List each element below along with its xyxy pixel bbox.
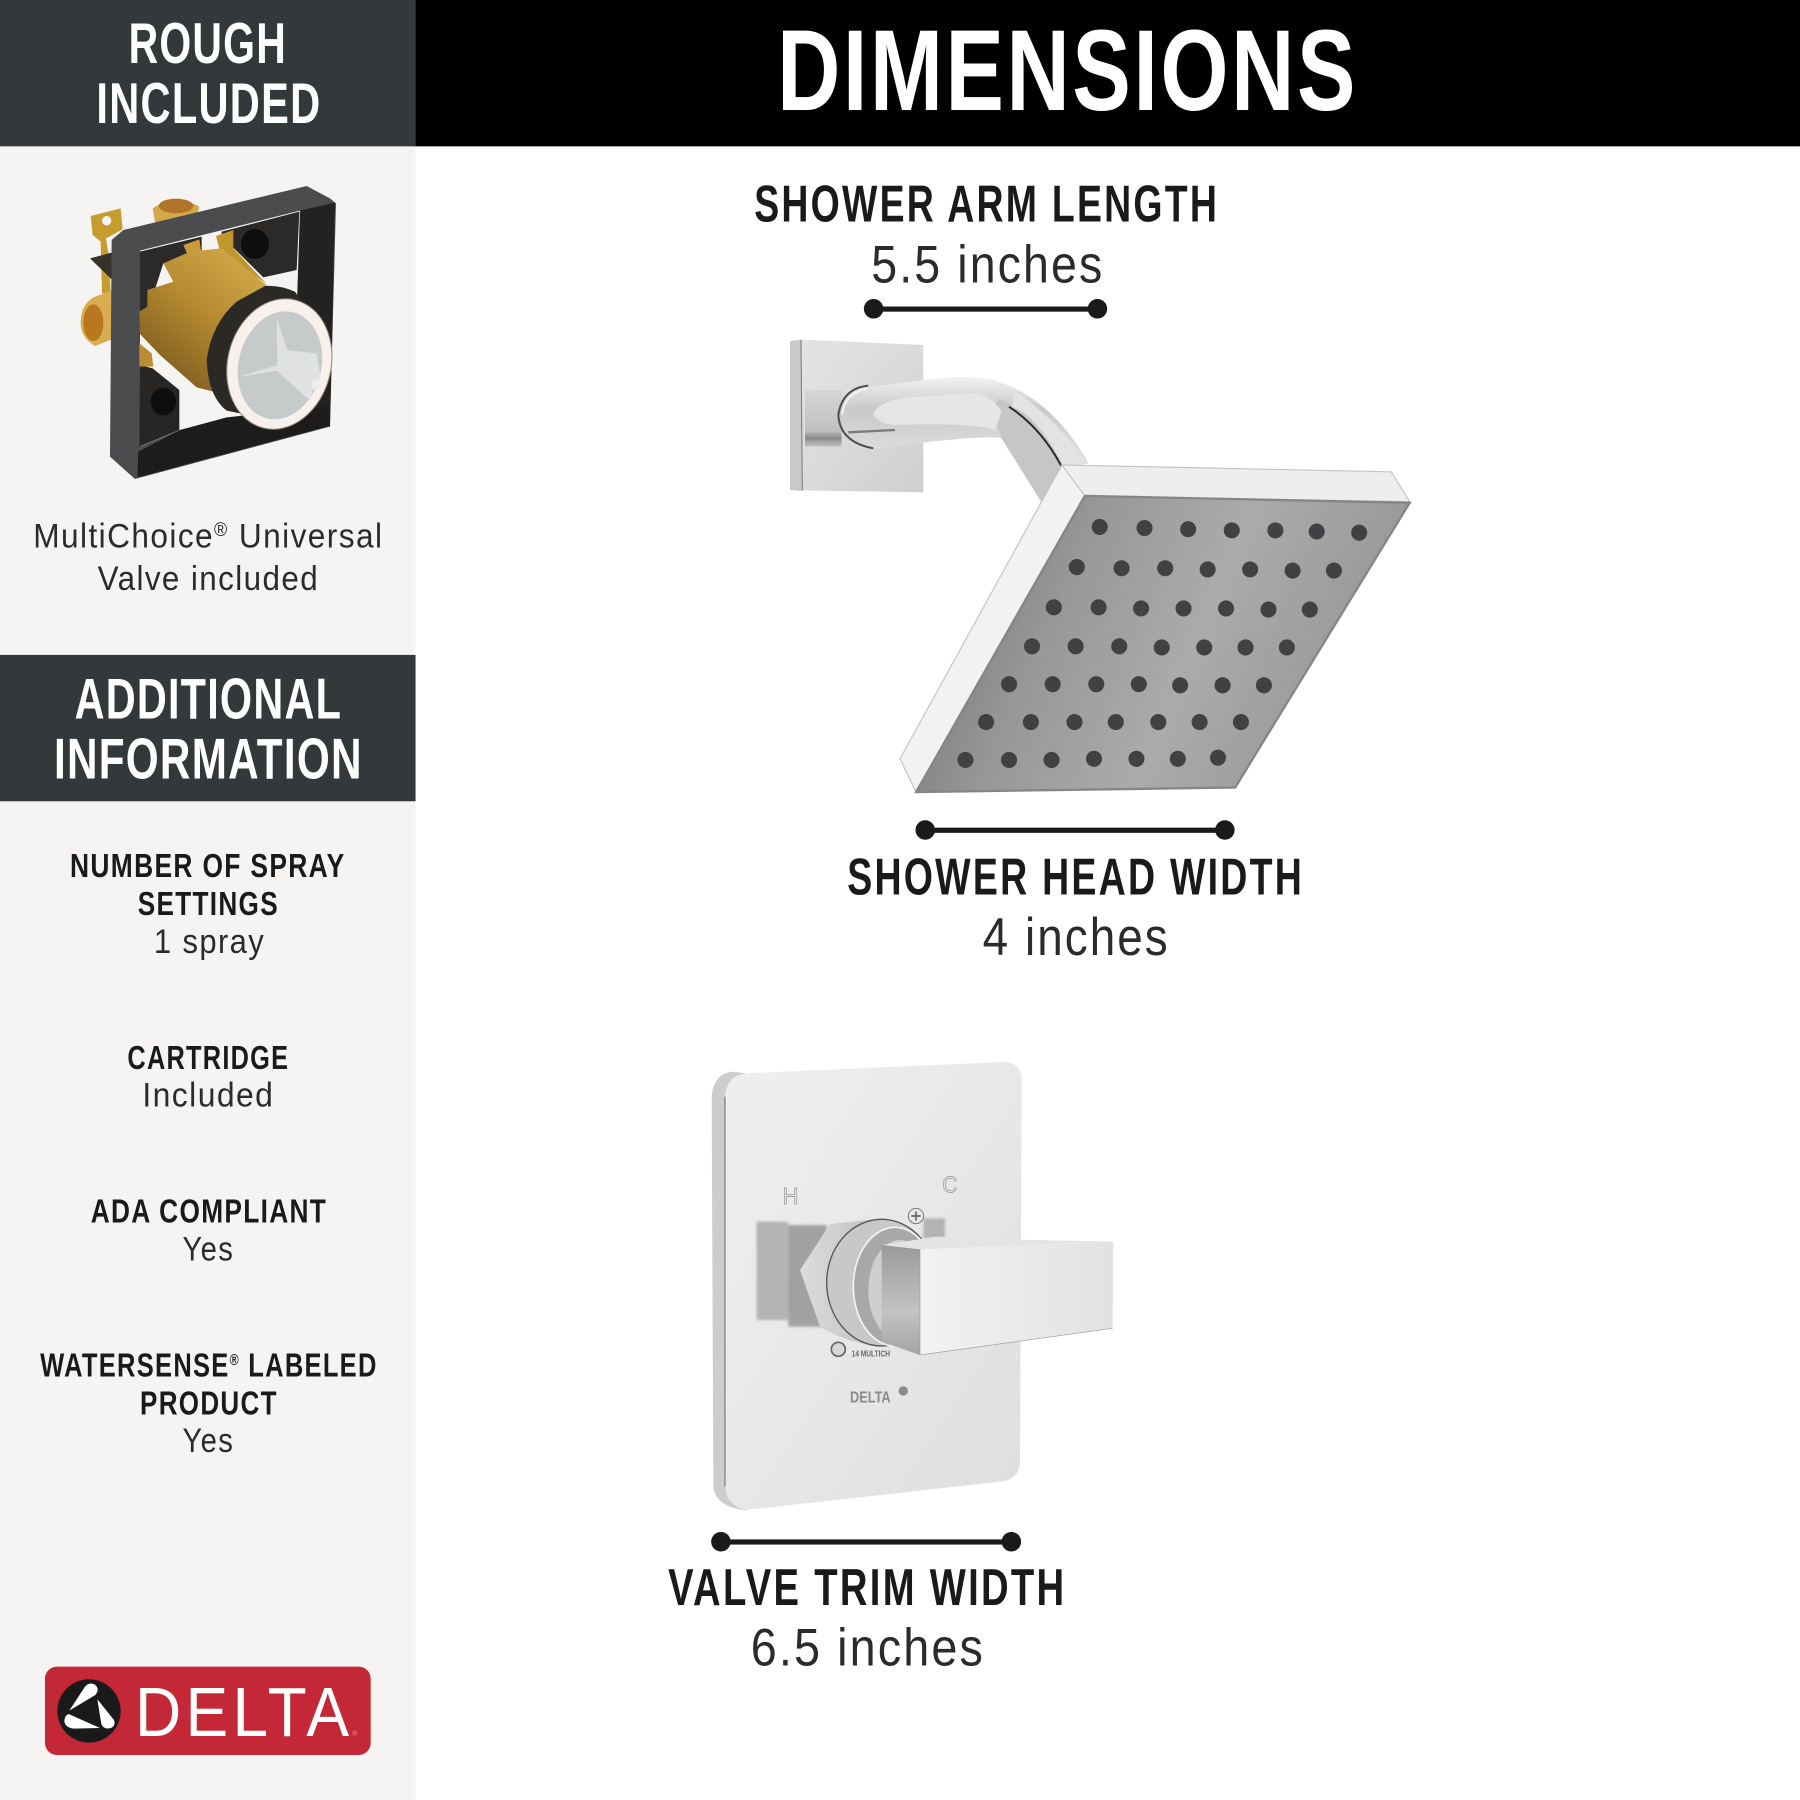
label: valve trim width: VALVE TRIM WIDTH [668,1558,1066,1616]
left pipe [81,291,112,346]
header: rough included: INCLUDED [96,72,321,136]
trim plate: C [942,1172,958,1198]
info: cartridge: Included [142,1077,274,1115]
frame [110,186,336,479]
label: valve trim width [668,1558,1066,1678]
info: spray settings: 1 spray [154,923,265,961]
info: ADA compliant: ADA COMPLIANT [91,1194,327,1231]
cartridge [207,286,313,413]
brass body [183,239,202,260]
header: additional information [0,655,416,801]
handle and collar [757,1208,1113,1359]
header: additional information: ADDITIONAL [75,668,342,732]
image: valve trim plate and handle [712,1062,1113,1511]
info: cartridge [127,1040,289,1115]
image: MultiChoice rough valve [81,186,345,479]
label: shower arm length: 5.5 inches [871,235,1104,294]
mounting tab [91,208,123,293]
header: rough included: ROUGH [129,12,287,76]
label: shower arm length: SHOWER ARM LENGTH [754,175,1219,233]
label: shower head width [847,847,1304,967]
header: dimensions title: DIMENSIONS [777,7,1358,135]
trim plate [712,1062,1022,1511]
label: valve trim width: 6.5 inches [751,1619,985,1678]
header: dimensions title [416,0,1800,146]
text: MultiChoice caption: Valve included [98,560,319,598]
logo: Delta [45,1667,371,1755]
trim plate: H [783,1183,799,1209]
handle and collar: 14 MULTICH [852,1350,890,1359]
label: shower head width: 4 inches [983,908,1170,967]
info: WaterSense labeled [40,1347,378,1460]
info: WaterSense labeled: LABELED [240,1347,378,1384]
text: MultiChoice caption [33,518,383,598]
dimension line: shower head [915,820,1235,840]
label: shower head width: SHOWER HEAD WIDTH [847,847,1304,905]
dimension line: valve trim [711,1532,1021,1551]
left sidebar background [0,0,416,1800]
head side faces [1062,465,1410,502]
header: rough included [0,0,416,146]
logo: Delta: ® [352,1730,357,1738]
text: MultiChoice caption: Universal [229,518,383,556]
image: shower head and arm [790,340,1410,792]
info: WaterSense labeled: Yes [183,1422,234,1460]
logo: Delta: DELTA [135,1673,353,1751]
text: MultiChoice caption: MultiChoice [33,518,230,556]
top pipe [153,199,199,227]
info: ADA compliant: Yes [183,1230,234,1268]
head spray face [916,496,1410,792]
spray nozzles [957,519,1367,768]
info: ADA compliant [91,1194,327,1268]
info: WaterSense labeled: ® [230,1351,240,1369]
info: WaterSense labeled: WATERSENSE [40,1347,287,1384]
text: MultiChoice caption: ® [214,519,229,541]
info: spray settings [70,848,346,961]
fittings [241,229,269,259]
header: additional information: INFORMATION [54,727,363,791]
info: cartridge: CARTRIDGE [127,1040,289,1077]
dimension line: shower arm [864,299,1107,319]
label: shower arm length [754,175,1219,294]
info: WaterSense labeled: PRODUCT [140,1385,278,1422]
trim plate: DELTA [850,1390,891,1407]
info: spray settings: NUMBER OF SPRAY [70,848,346,885]
flange and arm [790,340,1088,505]
info: spray settings: SETTINGS [138,886,279,923]
